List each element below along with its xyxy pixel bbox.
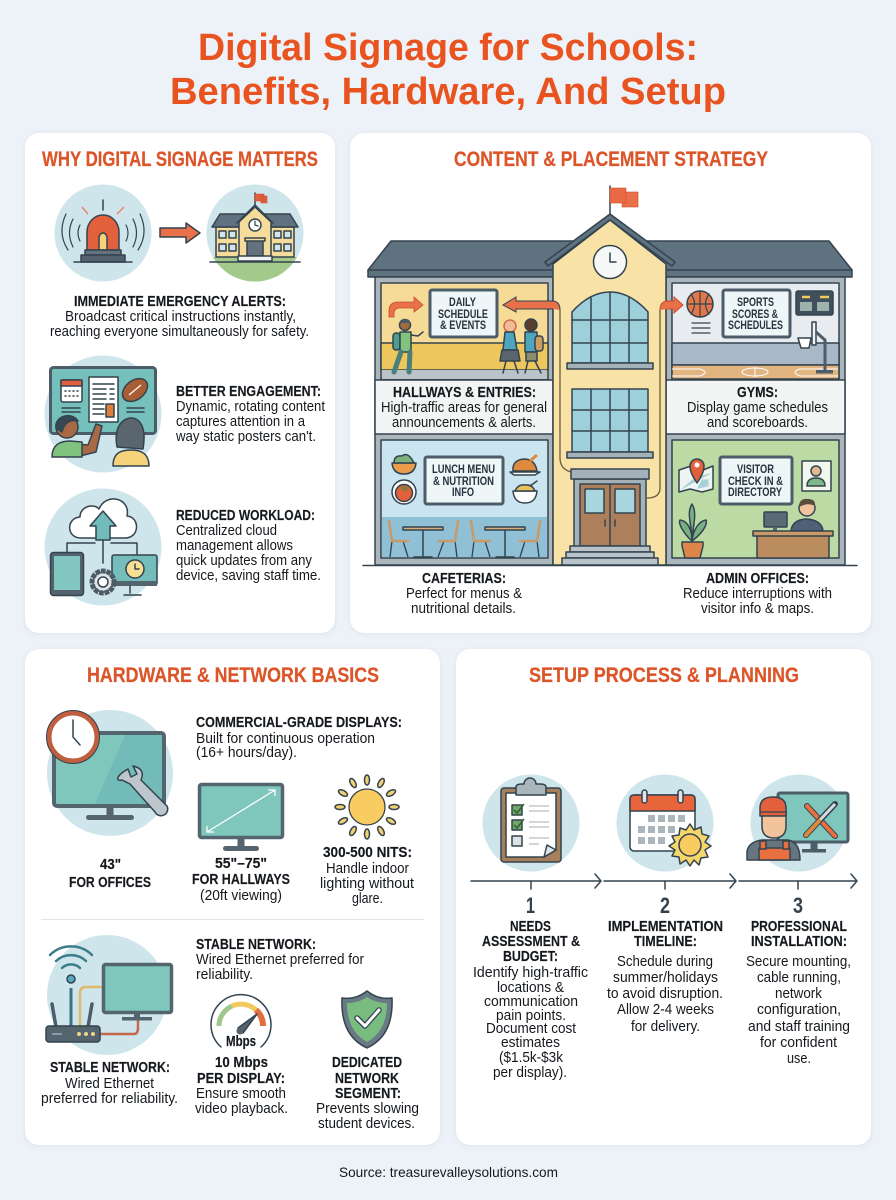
- step 2: implementation timeline: IMPLEMENTATION: [608, 919, 723, 935]
- heading: hardware and network basics: HARDWARE & NETWORK BASICS: [87, 664, 379, 687]
- icon: display with clock and wrench: [46, 710, 173, 836]
- illustration: school building cross-section: [363, 186, 857, 566]
- text: commercial-grade displays: [196, 715, 402, 761]
- step 1: needs assessment: 1: [526, 893, 535, 918]
- text: stable network caption: STABLE NETWORK:: [50, 1060, 170, 1076]
- text: immediate emergency alerts: Broadcast critical instructions instantly,: [65, 309, 296, 325]
- text: dedicated network segment: Prevents slowing: [316, 1101, 419, 1117]
- text: commercial-grade displays: COMMERCIAL-GRADE DISPLAYS:: [196, 715, 402, 731]
- text: 55-75 inch for hallways: [192, 856, 290, 904]
- text: 300-500 nits: 300-500 NITS:: [323, 845, 412, 861]
- text: better engagement: Dynamic, rotating content: [176, 399, 325, 415]
- room: hallway: [381, 283, 548, 379]
- text: reduced workload: quick updates from any: [176, 553, 313, 569]
- text: 55-75 inch for hallways: 55"–75": [215, 856, 267, 872]
- central tower: [503, 186, 683, 565]
- text: 55-75 inch for hallways: FOR HALLWAYS: [192, 872, 290, 888]
- text: dedicated network segment: [316, 1055, 419, 1132]
- heading: setup process and planning: SETUP PROCESS & PLANNING: [529, 664, 799, 687]
- screen: daily schedule: SCHEDULE: [438, 309, 488, 321]
- step 1: needs assessment: ASSESSMENT &: [482, 934, 580, 950]
- icon: engagement display with students: [44, 356, 162, 472]
- text: 10 mbps per display: PER DISPLAY:: [197, 1071, 285, 1087]
- icon: router and monitor: [46, 935, 172, 1055]
- icon: sun brightness: [335, 775, 399, 839]
- icon: security shield: [342, 991, 392, 1048]
- step 2: implementation timeline: Allow 2-4 weeks: [617, 1002, 714, 1018]
- screen: visitor check in: [720, 457, 792, 504]
- step 1: needs assessment: NEEDS: [510, 919, 551, 935]
- icon: school building: [206, 184, 304, 282]
- room: cafeteria: [381, 440, 548, 558]
- step 3: professional installation: and staff training: [748, 1019, 850, 1035]
- step 3: professional installation: [746, 893, 851, 1067]
- step 3: professional installation: INSTALLATION:: [751, 934, 847, 950]
- label block: hallways: [375, 380, 553, 434]
- screen: lunch menu: & NUTRITION: [433, 476, 494, 488]
- text: 43 inch for offices: 43": [100, 857, 121, 873]
- text: reduced workload: device, saving staff time.: [176, 568, 321, 584]
- step 2: implementation timeline: to avoid disruption.: [607, 986, 723, 1002]
- screen: lunch menu: LUNCH MENU: [432, 464, 495, 476]
- text: dedicated network segment: DEDICATED: [332, 1055, 402, 1071]
- step 3: professional installation: cable running,: [757, 970, 841, 986]
- step 3: professional installation: use.: [787, 1051, 811, 1067]
- icon: cloud management: [44, 488, 162, 606]
- text: 43 inch for offices: [69, 857, 151, 891]
- text: reduced workload: [176, 508, 321, 584]
- timeline arrows: [471, 874, 857, 889]
- text: dedicated network segment: SEGMENT:: [335, 1086, 401, 1102]
- icon: clipboard checklist: [482, 774, 580, 872]
- screen: sports scores: [723, 290, 790, 337]
- text: stable network heading: Wired Ethernet preferred for: [196, 952, 364, 968]
- text: reduced workload: Centralized cloud: [176, 523, 277, 539]
- screen: visitor check in: VISITOR: [737, 464, 775, 476]
- title: Benefits, Hardware, And Setup: [170, 71, 726, 113]
- step 1: needs assessment: pain points.: [496, 1008, 566, 1024]
- icon: potted plant: [680, 504, 706, 558]
- connector lines with arrows: [503, 297, 683, 498]
- step 1: needs assessment: Identify high-traffic: [473, 965, 588, 981]
- screen: lunch menu: INFO: [452, 487, 474, 499]
- text: stable network heading: STABLE NETWORK:: [196, 937, 316, 953]
- arrow: alert to school: [160, 223, 200, 243]
- text: immediate emergency alerts: [50, 294, 309, 340]
- step 3: professional installation: PROFESSIONAL: [751, 919, 847, 935]
- text: 300-500 nits: Handle indoor: [326, 861, 409, 877]
- label block: hallways: High-traffic areas for general: [381, 400, 547, 416]
- room: admin office: [672, 440, 839, 558]
- step 1: needs assessment: communication: [484, 994, 578, 1010]
- step 3: professional installation: configuration,: [757, 1002, 841, 1018]
- step 2: implementation timeline: Schedule during: [617, 954, 713, 970]
- screen: sports scores: SPORTS: [737, 297, 774, 309]
- text: admin offices: [683, 571, 832, 617]
- step 1: needs assessment: Document cost: [486, 1021, 576, 1037]
- step 1: needs assessment: per display).: [493, 1065, 567, 1081]
- icon: size diagonal monitor: [200, 784, 282, 851]
- icon: basketball hoop: [798, 322, 833, 374]
- students in hallway: [393, 319, 543, 373]
- screen: lunch menu: [425, 457, 503, 504]
- reception desk and staff: [753, 499, 833, 558]
- portrait frame: [802, 461, 831, 491]
- panel: content and placement strategy: [350, 133, 871, 633]
- text: cafeterias: Perfect for menus &: [406, 586, 522, 602]
- screen: sports scores: SCORES &: [732, 309, 778, 321]
- text: stable network caption: [41, 1060, 178, 1107]
- panel: hardware and network basics: [25, 649, 440, 1145]
- label block: hallways: HALLWAYS & ENTRIES:: [393, 385, 536, 401]
- step 2: implementation timeline: TIMELINE:: [634, 934, 697, 950]
- heading: content and placement strategy: CONTENT & PLACEMENT STRATEGY: [454, 148, 768, 171]
- step 2: implementation timeline: [607, 893, 723, 1035]
- text: stable network heading: [196, 937, 364, 983]
- step 1: needs assessment: ($1.5k-$3k: [499, 1050, 564, 1066]
- screen: daily schedule: DAILY: [449, 297, 476, 309]
- text: reduced workload: REDUCED WORKLOAD:: [176, 508, 315, 524]
- step 2: implementation timeline: for delivery.: [631, 1019, 700, 1035]
- step 1: needs assessment: locations &: [497, 980, 564, 996]
- screen: daily schedule: [430, 290, 497, 337]
- panel: setup process and planning: [456, 649, 871, 1145]
- screen: visitor check in: CHECK IN &: [728, 476, 783, 488]
- icon: emergency siren: [54, 184, 152, 282]
- building roof: [368, 241, 852, 277]
- text: 10 mbps per display: [195, 1055, 288, 1117]
- text: 43 inch for offices: FOR OFFICES: [69, 875, 151, 891]
- step 2: implementation timeline: 2: [660, 893, 670, 918]
- text: admin offices: Reduce interruptions with: [683, 586, 832, 602]
- text: immediate emergency alerts: reaching everyone simultaneously for safety.: [50, 324, 309, 340]
- text: dedicated network segment: student devices.: [318, 1116, 415, 1132]
- clock: [594, 246, 626, 278]
- source credit: Source: treasurevalleysolutions.com: [339, 1164, 558, 1180]
- flag: [610, 186, 638, 214]
- icon: basketball: [687, 291, 713, 333]
- step 3: professional installation: network: [775, 986, 823, 1002]
- upper window: [567, 292, 653, 369]
- room: gym: [672, 283, 839, 379]
- text: 300-500 nits: glare.: [352, 891, 383, 907]
- text: better engagement: way static posters can't.: [175, 429, 316, 445]
- step 3: professional installation: 3: [793, 893, 803, 918]
- text: dedicated network segment: NETWORK: [335, 1071, 399, 1087]
- heading: why digital signage matters: WHY DIGITAL SIGNAGE MATTERS: [42, 148, 318, 171]
- text: better engagement: captures attention in a: [176, 414, 306, 430]
- text: 55-75 inch for hallways: (20ft viewing): [200, 888, 282, 904]
- text: reduced workload: management allows: [176, 538, 293, 554]
- screen: sports scores: SCHEDULES: [728, 320, 783, 332]
- lower window: [567, 389, 653, 458]
- step 2: implementation timeline: summer/holidays: [613, 970, 718, 986]
- text: 300-500 nits: [320, 845, 414, 907]
- text: commercial-grade displays: (16+ hours/day).: [196, 745, 297, 761]
- text: cafeterias: [406, 571, 522, 617]
- text: stable network heading: reliability.: [196, 967, 253, 983]
- icon: calendar with sun: [616, 774, 714, 872]
- screen: visitor check in: DIRECTORY: [728, 487, 782, 499]
- text: stable network caption: preferred for reliability.: [41, 1091, 178, 1107]
- title: Digital Signage for Schools:: [198, 27, 698, 69]
- step 3: professional installation: Secure mounting,: [746, 954, 851, 970]
- arrow: small curved: [389, 297, 423, 317]
- label block: gyms: and scoreboards.: [707, 415, 808, 431]
- text: 300-500 nits: lighting without: [320, 876, 414, 892]
- screen: daily schedule: & EVENTS: [440, 320, 486, 332]
- step 1: needs assessment: estimates: [501, 1035, 560, 1051]
- step 1: needs assessment: [473, 893, 588, 1081]
- label block: gyms: Display game schedules: [687, 400, 828, 416]
- text: immediate emergency alerts: IMMEDIATE EMERGENCY ALERTS:: [74, 294, 286, 310]
- icon: scoreboard: [796, 291, 833, 315]
- icons: food: [392, 455, 540, 504]
- left and right wings: [375, 277, 845, 565]
- title: [170, 27, 726, 113]
- text: 10 mbps per display: video playback.: [195, 1101, 288, 1117]
- step 3: professional installation: for confident: [760, 1035, 837, 1051]
- text: admin offices: visitor info & maps.: [701, 601, 814, 617]
- entrance doors and steps: [562, 469, 658, 565]
- text: better engagement: BETTER ENGAGEMENT:: [176, 384, 321, 400]
- text: 10 mbps per display: Ensure smooth: [196, 1086, 286, 1102]
- text: cafeterias: nutritional details.: [411, 601, 516, 617]
- label block: hallways: announcements & alerts.: [392, 415, 536, 431]
- text: better engagement: [175, 384, 325, 445]
- panel: why digital signage matters: [25, 133, 335, 633]
- text: admin offices: ADMIN OFFICES:: [706, 571, 809, 587]
- step 1: needs assessment: BUDGET:: [503, 949, 558, 965]
- icon: speed gauge: [211, 995, 271, 1050]
- text: cafeterias: CAFETERIAS:: [422, 571, 506, 587]
- label block: gyms: GYMS:: [737, 385, 778, 401]
- text: commercial-grade displays: Built for continuous operation: [196, 731, 375, 747]
- icon: speed gauge: Mbps: [226, 1034, 256, 1050]
- tables and chairs: [389, 521, 540, 557]
- text: stable network caption: Wired Ethernet: [65, 1076, 154, 1092]
- icon: map with pin: [679, 459, 713, 492]
- label block: gyms: [666, 380, 845, 434]
- text: 10 mbps per display: 10 Mbps: [215, 1055, 268, 1071]
- icon: installation technician: [747, 774, 848, 872]
